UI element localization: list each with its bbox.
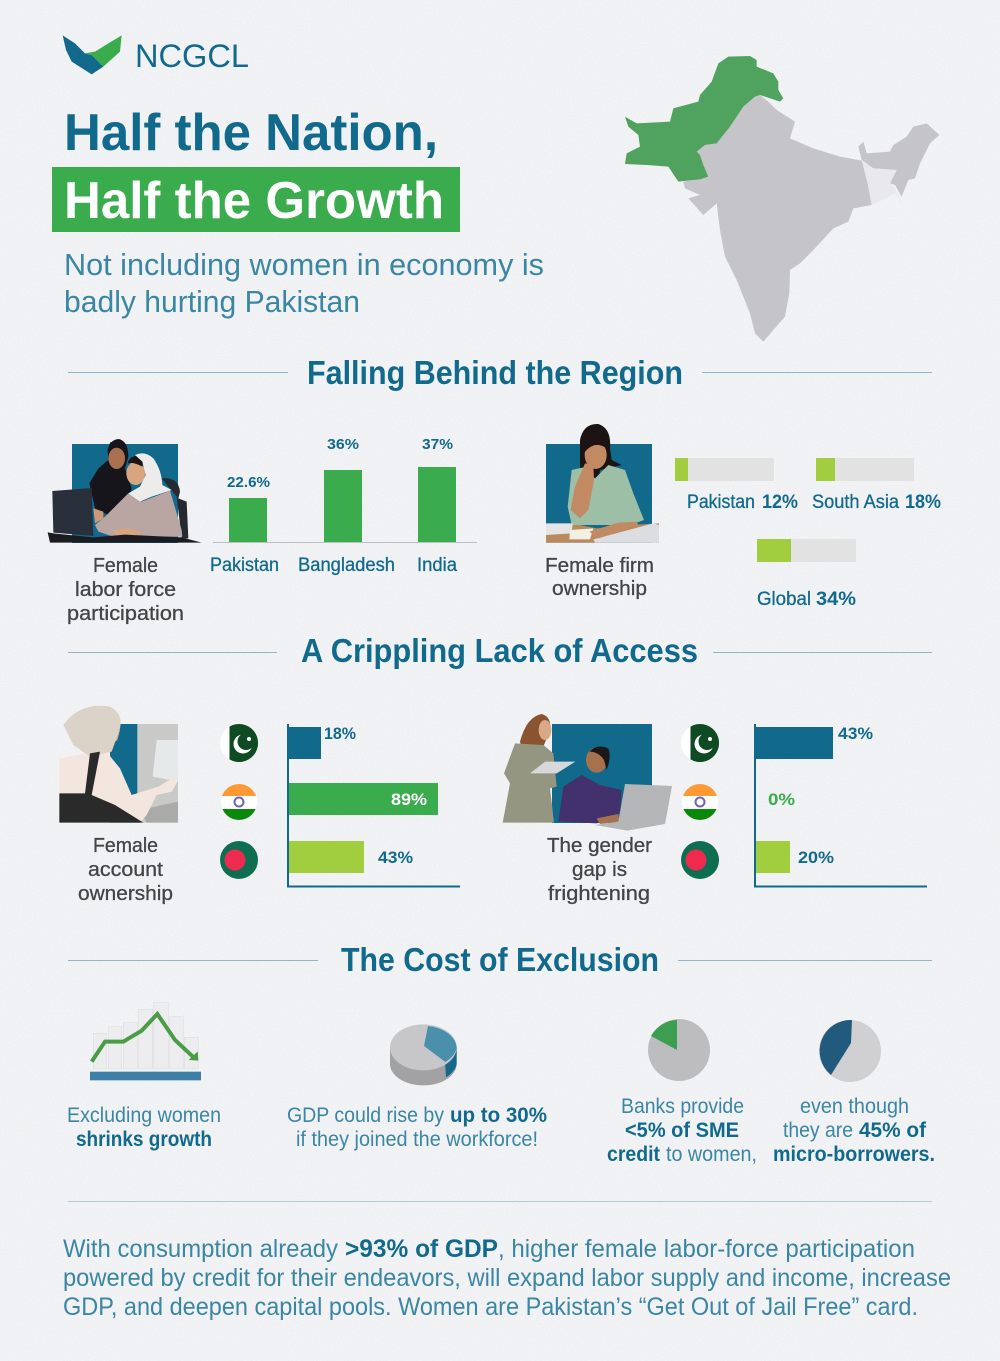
caption: if they joined the workforce! bbox=[296, 1128, 538, 1151]
conclusion text: GDP, and deepen capital pools. Women are Pakistan’s “Get Out of Jail Free” card. bbox=[63, 1293, 918, 1321]
caption: The gender bbox=[547, 835, 652, 857]
bar chart: gender gap: 20% bbox=[798, 848, 834, 867]
icon: bird logo bbox=[63, 35, 122, 74]
map: South Asia with Pakistan highlighted bbox=[625, 56, 939, 342]
caption bbox=[545, 555, 654, 600]
progress bar: Global 34% bbox=[757, 539, 856, 610]
bar chart: account ownership: 89% bbox=[391, 790, 427, 809]
map: Pakistan bbox=[625, 56, 783, 182]
caption bbox=[67, 555, 184, 625]
progress bar: Pakistan 12%: 12% bbox=[762, 492, 798, 513]
pie chart: micro-borrower share bbox=[819, 1020, 881, 1082]
heading: A Crippling Lack of Access: A Crippling Lack of Access bbox=[301, 632, 698, 669]
conclusion text bbox=[63, 1235, 951, 1321]
map: India bbox=[683, 95, 872, 342]
map: Bangladesh bbox=[862, 160, 903, 205]
panel: female firm ownership bbox=[545, 424, 941, 610]
caption bbox=[607, 1095, 757, 1166]
panel: micro-borrowers bbox=[773, 1020, 935, 1166]
progress bar: Pakistan 12% bbox=[675, 458, 798, 513]
conclusion text: powered by credit for their endeavors, will expand labor supply and income, increase bbox=[63, 1264, 951, 1292]
caption: Female bbox=[93, 835, 158, 857]
caption bbox=[67, 1104, 221, 1151]
progress bar: South Asia 18%: South Asia bbox=[812, 492, 899, 513]
title highlight band bbox=[52, 167, 460, 232]
panel: SME credit bbox=[607, 1019, 757, 1166]
caption: Excluding women bbox=[67, 1104, 221, 1127]
icon: Bangladesh flag bbox=[681, 841, 719, 879]
panel: female labor force participation bbox=[48, 436, 477, 625]
bar chart: labor force: 22.6% bbox=[227, 474, 270, 491]
caption: shrinks growth bbox=[76, 1128, 212, 1151]
caption: ownership bbox=[552, 578, 647, 600]
caption: 45% of bbox=[859, 1119, 927, 1142]
pie chart: SME credit share bbox=[648, 1019, 710, 1081]
progress bar: Global 34%: 34% bbox=[816, 589, 856, 610]
bar chart: account ownership: 18% bbox=[324, 724, 356, 743]
icon: India flag bbox=[682, 784, 718, 820]
bar chart: account ownership: 43% bbox=[378, 848, 413, 867]
caption: <5% of SME bbox=[625, 1119, 739, 1142]
caption: up to 30% bbox=[450, 1104, 547, 1127]
bar chart: gender gap: 0% bbox=[768, 790, 795, 809]
bar chart: labor force: Bangladesh bbox=[298, 555, 395, 576]
subtitle: badly hurting Pakistan bbox=[64, 284, 360, 319]
caption: labor force bbox=[75, 579, 176, 601]
logo wordmark: NCGCL bbox=[135, 38, 249, 74]
title line one: Half the Nation, bbox=[64, 104, 438, 162]
icon: India flag bbox=[221, 784, 257, 820]
caption bbox=[287, 1104, 547, 1151]
panel: the gender gap bbox=[503, 714, 927, 905]
progress bar: South Asia 18%: 18% bbox=[905, 492, 941, 513]
bar chart: labor force: Pakistan bbox=[210, 555, 279, 576]
bar chart: labor force: India bbox=[417, 555, 457, 576]
icon: 3D pie chart bbox=[390, 1024, 457, 1085]
photo: woman with tablet and man with laptop bbox=[503, 714, 672, 831]
caption bbox=[773, 1095, 935, 1166]
conclusion text: With consumption already bbox=[63, 1235, 338, 1263]
caption: participation bbox=[67, 603, 184, 625]
caption: account bbox=[88, 859, 163, 881]
caption: Female bbox=[93, 555, 158, 577]
photo: two women at a laptop bbox=[48, 439, 202, 543]
progress bar: Global 34%: Global bbox=[757, 589, 811, 610]
caption: they are bbox=[783, 1119, 853, 1142]
icon: Pakistan flag bbox=[681, 724, 719, 762]
subtitle bbox=[64, 247, 544, 319]
caption: credit bbox=[607, 1143, 660, 1166]
panel: female account ownership bbox=[59, 706, 460, 905]
photo: woman on phone at desk bbox=[546, 424, 659, 543]
caption: Banks provide bbox=[621, 1095, 744, 1118]
caption: Female firm bbox=[545, 555, 654, 577]
bar chart: gender gap bbox=[755, 724, 927, 886]
caption: ownership bbox=[78, 883, 173, 905]
logo: NCGCL bbox=[63, 35, 249, 74]
progress bar: South Asia 18% bbox=[812, 458, 941, 513]
caption: gap is bbox=[572, 859, 627, 881]
caption: frightening bbox=[548, 883, 650, 905]
icon: Pakistan flag bbox=[220, 724, 258, 762]
bar chart: labor force: 37% bbox=[422, 436, 453, 453]
bar chart: account ownership bbox=[288, 724, 460, 886]
caption: even though bbox=[800, 1095, 909, 1118]
heading: Falling Behind the Region: Falling Behind the Region bbox=[307, 354, 683, 391]
bar chart: labor force: 36% bbox=[327, 436, 359, 453]
progress bar: Pakistan 12%: Pakistan bbox=[687, 492, 755, 513]
conclusion text: >93% of GDP bbox=[345, 1235, 498, 1263]
subtitle: Not including women in economy is bbox=[64, 247, 544, 282]
caption: to women, bbox=[666, 1143, 757, 1166]
title line two: Half the Growth bbox=[64, 172, 444, 230]
icon: Bangladesh flag bbox=[220, 841, 258, 879]
heading: The Cost of Exclusion: The Cost of Exclusion bbox=[341, 941, 659, 978]
caption: GDP could rise by bbox=[287, 1104, 444, 1127]
bar chart: gender gap: 43% bbox=[838, 724, 873, 743]
caption bbox=[78, 835, 173, 905]
icon: declining line chart bbox=[90, 1003, 201, 1080]
panel: shrinking growth bbox=[67, 1003, 221, 1151]
map: northeast India bbox=[858, 123, 939, 197]
title bbox=[52, 104, 460, 232]
panel: GDP rise bbox=[287, 1024, 547, 1151]
caption bbox=[547, 835, 652, 905]
bar chart: labor force bbox=[210, 436, 477, 576]
caption: micro-borrowers. bbox=[773, 1143, 935, 1166]
photo: woman at ATM bbox=[59, 706, 178, 823]
conclusion text: , higher female labor-force participation bbox=[498, 1235, 915, 1263]
